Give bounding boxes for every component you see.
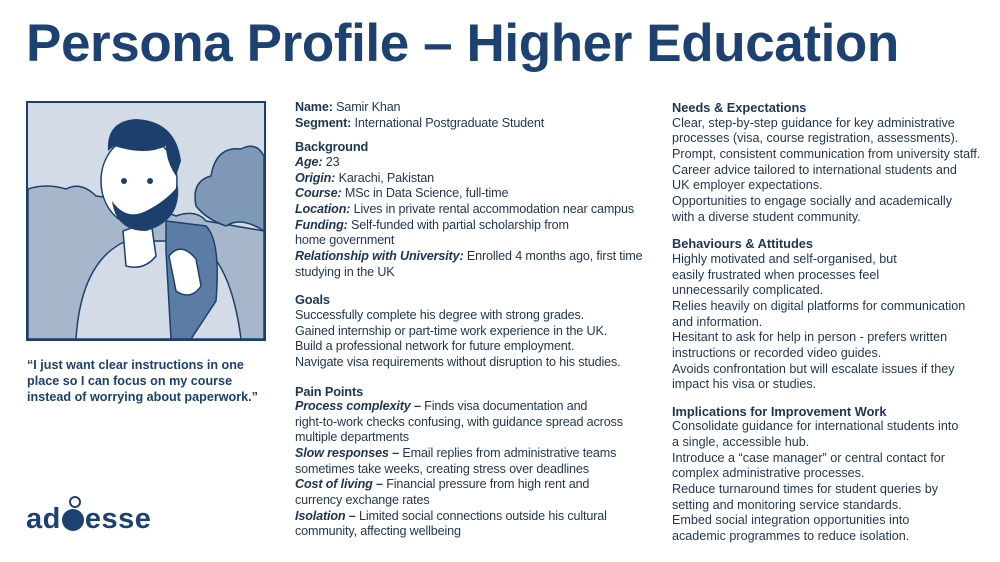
right column: needs, behaviours, implications: and information. <box>672 315 762 329</box>
middle column: profile details: studying in the UK <box>295 265 395 279</box>
right column: needs, behaviours, implications: Needs & Expectations <box>672 100 806 115</box>
right column: needs, behaviours, implications: Career advice tailored to international students and <box>672 163 957 177</box>
right column: needs, behaviours, implications: academic programmes to reduce isolation. <box>672 529 909 543</box>
right column: needs, behaviours, implications: Prompt, consistent communication from university staff. <box>672 147 980 161</box>
middle column: profile details <box>294 100 642 538</box>
middle column: profile details: Location: Lives in private rental accommodation near campus <box>295 202 634 216</box>
middle column: profile details: Gained internship or part-time work experience in the UK. <box>295 324 607 338</box>
quote: place so I can focus on my course <box>27 374 232 388</box>
middle column: profile details: Funding: Self-funded with partial scholarship from <box>295 218 569 232</box>
right column: needs, behaviours, implications: Relies heavily on digital platforms for communication <box>672 299 965 313</box>
middle column: profile details: Slow responses – Email replies from administrative teams <box>295 446 616 460</box>
right column: needs, behaviours, implications: Embed social integration opportunities into <box>672 513 909 527</box>
right column: needs, behaviours, implications: processes (visa, course registration, assessments). <box>672 131 958 145</box>
quote: instead of worrying about paperwork.” <box>27 390 258 404</box>
middle column: profile details: Name: Samir Khan <box>295 100 400 114</box>
right column: needs, behaviours, implications: Reduce turnaround times for student queries by <box>672 482 938 496</box>
middle column: profile details: Relationship with University: Enrolled 4 months ago, first time <box>295 249 642 263</box>
right column: needs, behaviours, implications: Clear, step-by-step guidance for key administrative <box>672 116 955 130</box>
quote: “I just want clear instructions in one <box>27 358 244 372</box>
right column: needs, behaviours, implications: unnecessarily complicated. <box>672 283 823 297</box>
right column: needs, behaviours, implications: Avoids confrontation but will escalate issues if they <box>672 362 955 376</box>
title: Persona Profile – Higher Education <box>26 14 899 73</box>
middle column: profile details: Build a professional network for future employment. <box>295 339 574 353</box>
middle column: profile details: multiple departments <box>295 430 409 444</box>
middle column: profile details: Segment: International Postgraduate Student <box>295 116 544 130</box>
right column: needs, behaviours, implications: Highly motivated and self-organised, but <box>672 252 897 266</box>
middle column: profile details: sometimes take weeks, creating stress over deadlines <box>295 462 589 476</box>
right column: needs, behaviours, implications: Behaviours & Attitudes <box>672 236 813 251</box>
middle column: profile details: Age: 23 <box>295 155 339 169</box>
middle column: profile details: currency exchange rates <box>295 493 429 507</box>
middle column: profile details: Process complexity – Finds visa documentation and <box>295 399 587 413</box>
middle column: profile details: Origin: Karachi, Pakistan <box>295 171 434 185</box>
middle column: profile details: Navigate visa requirements without disruption to his studies. <box>295 355 620 369</box>
logo: adoesse: ad esse <box>26 503 151 535</box>
right column: needs, behaviours, implications: setting and monitoring service standards. <box>672 498 902 512</box>
middle column: profile details: Course: MSc in Data Science, full-time <box>295 186 508 200</box>
right column: needs, behaviours, implications: impact his visa or studies. <box>672 377 816 391</box>
right column: needs, behaviours, implications: easily frustrated when processes feel <box>672 268 879 282</box>
middle column: profile details: Isolation – Limited social connections outside his cultural <box>295 509 607 523</box>
right column: needs, behaviours, implications: with a diverse student community. <box>672 210 861 224</box>
middle column: profile details: Background <box>295 139 368 154</box>
right column: needs, behaviours, implications: Opportunities to engage socially and academically <box>672 194 952 208</box>
middle column: profile details: Pain Points <box>295 384 363 398</box>
middle column: profile details: Successfully complete his degree with strong grades. <box>295 308 584 322</box>
right column: needs, behaviours, implications: a single, accessible hub. <box>672 435 809 449</box>
middle column: profile details: right-to-work checks confusing, with guidance spread across <box>295 415 623 429</box>
right column: needs, behaviours, implications: Implications for Improvement Work <box>672 404 887 419</box>
right column: needs, behaviours, implications: complex administrative processes. <box>672 466 864 480</box>
middle column: profile details: community, affecting wellbeing <box>295 524 461 538</box>
right column: needs, behaviours, implications: instructions or recorded video guides. <box>672 346 881 360</box>
middle column: profile details: home government <box>295 233 394 247</box>
right column: needs, behaviours, implications: Introduce a “case manager” or central contact for <box>672 451 945 465</box>
right column: needs, behaviours, implications: Hesitant to ask for help in person - prefers written <box>672 330 947 344</box>
middle column: profile details: Cost of living – Financial pressure from high rent and <box>295 477 589 491</box>
quote <box>27 358 258 404</box>
middle column: profile details: Goals <box>295 292 330 307</box>
right column: needs, behaviours, implications: UK employer expectations. <box>672 178 822 192</box>
right column: needs, behaviours, implications <box>672 100 980 543</box>
illustration: persona portrait <box>26 101 266 341</box>
right column: needs, behaviours, implications: Consolidate guidance for international students into <box>672 419 958 433</box>
